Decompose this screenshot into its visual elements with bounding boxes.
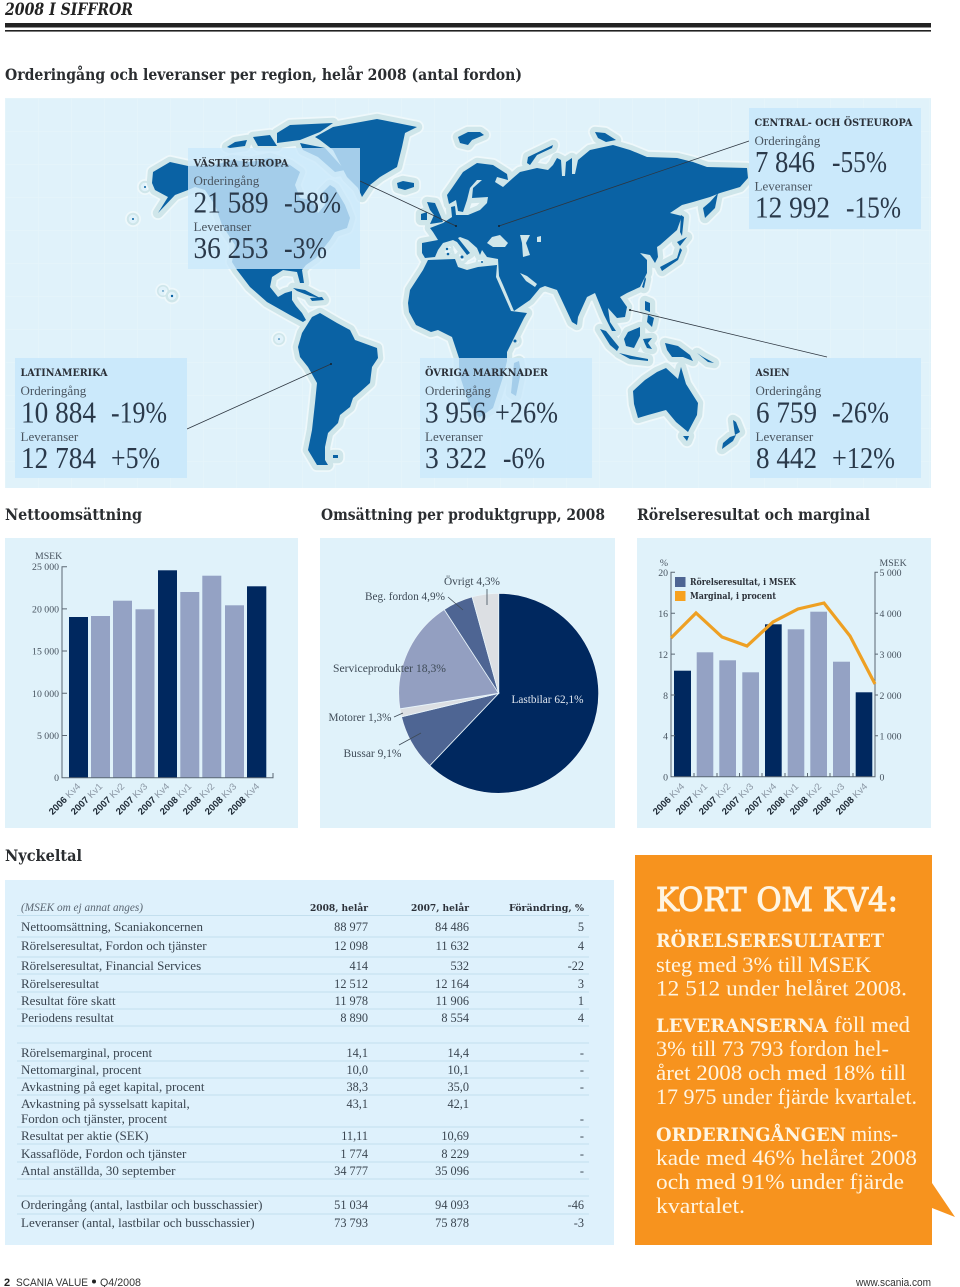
column: 2008: 1 774	[340, 1147, 368, 1161]
row labels	[21, 919, 263, 1230]
callout text: order intake	[656, 1121, 917, 1218]
pie labels	[328, 574, 584, 760]
box: Asien: -26%	[832, 394, 889, 430]
connector lines	[187, 141, 827, 429]
column: 2007: 14,4	[447, 1046, 469, 1060]
column: 2008: 414	[350, 959, 368, 973]
footer: page number and publication	[4, 1277, 141, 1287]
column: 2008: 88 977	[334, 920, 368, 934]
x axis labels: 2008 Kv3	[203, 781, 239, 818]
column: 2007: 532	[451, 959, 469, 973]
left axis labels: 4	[663, 732, 668, 742]
x axis labels	[651, 781, 870, 818]
box: Latinamerika: -19%	[111, 394, 167, 430]
left axis labels: 16	[658, 609, 668, 620]
column: change: -	[580, 1147, 584, 1161]
right axis labels	[880, 558, 907, 784]
pie	[399, 593, 599, 793]
heading: Nyckeltal: Nyckeltal	[5, 846, 82, 865]
table header: Förändring, %	[509, 903, 584, 914]
callout text: operating income: 12 512 under helåret 2008.	[656, 976, 907, 1000]
bars	[69, 570, 266, 778]
box: Central- och Östeuropa: 7 846	[755, 144, 815, 179]
column: 2008: 43,1	[346, 1097, 368, 1111]
pie labels: Övrigt 4,3%	[444, 574, 500, 588]
column: 2008: 11,11	[341, 1129, 368, 1143]
pie labels: Serviceprodukter 18,3%	[333, 663, 446, 675]
box: Asien: Leveranser	[756, 429, 814, 444]
legend: Rörelseresultat, i MSEK	[690, 577, 797, 588]
margin line	[671, 603, 875, 684]
left axis labels: 12	[658, 650, 668, 661]
y axis labels: 10 000	[32, 689, 59, 700]
callout text: order intake: ORDERINGÅNGEN	[656, 1123, 846, 1146]
page title: 2008 I SIFFROR	[4, 0, 133, 20]
callout text: deliveries: LEVERANSERNA	[656, 1015, 828, 1037]
legend: Marginal, i procent	[690, 591, 776, 602]
map: land masses	[132, 119, 748, 465]
box: Västra Europa: 36 253	[194, 230, 268, 265]
callout text: deliveries: föll med	[834, 1012, 910, 1037]
box: Asien: ASIEN	[755, 367, 790, 379]
row labels: Nettoomsättning, Scaniakoncernen	[21, 919, 203, 934]
box: Asien: 8 442	[756, 440, 817, 475]
box: Övriga marknader: +26%	[495, 394, 558, 430]
column: change: 4	[578, 939, 584, 953]
row labels: Fordon och tjänster, procent	[21, 1111, 167, 1126]
row labels: Resultat före skatt	[21, 993, 116, 1008]
column: change: 5	[578, 920, 584, 934]
x axis labels	[47, 781, 262, 818]
row labels: Leveranser (antal, lastbilar och busschassier)	[21, 1215, 255, 1230]
box: Central- och Östeuropa	[749, 108, 921, 229]
panel: operating income and margin chart	[637, 538, 931, 828]
box: Asien	[750, 358, 921, 478]
callout: Kort om Kv4	[635, 855, 955, 1245]
column: change: -22	[568, 959, 584, 973]
column: 2007: 11 906	[436, 994, 469, 1008]
callout text: deliveries: året 2008 och med 18% till	[656, 1060, 906, 1085]
box: Central- och Östeuropa: -55%	[832, 144, 887, 179]
x axis labels: 2007 Kv4	[743, 781, 779, 818]
box: Västra Europa: Orderingång	[194, 173, 260, 188]
column: change: -	[580, 1046, 584, 1060]
row labels: Resultat per aktie (SEK)	[21, 1128, 148, 1143]
column: change: 3	[578, 977, 584, 991]
column: 2008: 38,3	[346, 1080, 368, 1094]
column: 2007	[435, 920, 469, 1230]
box: Övriga marknader: Orderingång	[425, 383, 491, 398]
column: 2007: 94 093	[435, 1198, 469, 1212]
bars	[674, 612, 872, 777]
heading: orders and deliveries per region: Orderingång och leveranser per region, helår 2008 (antal fordon)	[5, 65, 522, 84]
x axis labels: 2007 Kv1	[674, 781, 710, 818]
column: 2007: 84 486	[435, 920, 469, 934]
callout text: order intake: kvartalet.	[656, 1193, 745, 1218]
box: Central- och Östeuropa: 12 992	[755, 190, 830, 224]
box: Central- och Östeuropa: CENTRAL- OCH ÖSTEUROPA	[754, 115, 913, 129]
panel: world map	[5, 98, 931, 488]
box: Asien: +12%	[832, 440, 895, 475]
box: Övriga marknader	[420, 358, 592, 478]
left axis labels: 8	[663, 691, 668, 702]
box: Västra Europa	[188, 148, 360, 269]
column: change: -	[580, 1080, 584, 1094]
right axis labels: 0	[880, 772, 884, 784]
heading: Rörelseresultat och marginal: Rörelseresultat och marginal	[637, 505, 870, 524]
panel: key figures table	[5, 880, 614, 1245]
x axis labels: 2008 Kv1	[765, 781, 801, 818]
panel: net sales bar chart	[5, 538, 298, 828]
x axis labels: 2008 Kv1	[158, 781, 194, 818]
row labels: Periodens resultat	[21, 1010, 114, 1025]
x axis labels: 2007 Kv4	[136, 781, 172, 818]
table header: 2007, helår	[411, 902, 470, 914]
row labels: Orderingång (antal, lastbilar och busschassier)	[21, 1197, 263, 1212]
right axis labels: 2 000	[880, 691, 902, 702]
column: 2007: 12 164	[435, 977, 469, 991]
row labels: Avkastning på eget kapital, procent	[21, 1079, 205, 1094]
box: Västra Europa: -3%	[284, 230, 327, 265]
pie labels: Bussar 9,1%	[344, 748, 402, 760]
box: Övriga marknader: -6%	[503, 440, 545, 475]
right axis labels: 4 000	[880, 609, 902, 620]
box: Latinamerika: Leveranser	[20, 429, 79, 444]
x axis labels: 2008 Kv4	[226, 781, 262, 818]
column: 2008	[334, 920, 368, 1230]
box: Övriga marknader: 3 956	[425, 394, 486, 430]
row labels: Antal anställda, 30 september	[21, 1163, 176, 1178]
right axis labels: 1 000	[880, 732, 902, 742]
column: change: -	[580, 1164, 584, 1178]
left axis labels	[658, 558, 668, 784]
column: 2008: 73 793	[334, 1216, 368, 1230]
left axis labels: %	[660, 558, 668, 569]
x axis labels: 2008 Kv2	[181, 781, 217, 818]
column: 2007: 35 096	[435, 1164, 469, 1178]
callout text: order intake: och med 91% under fjärde	[656, 1169, 904, 1194]
callout text: order intake: kade med 46% helåret 2008	[656, 1145, 917, 1170]
row labels: Kassaflöde, Fordon och tjänster	[21, 1146, 187, 1161]
box: Central- och Östeuropa: -15%	[846, 190, 901, 224]
column: 2007: 42,1	[447, 1097, 469, 1111]
callout text: order intake: mins-	[851, 1121, 898, 1146]
callout text: deliveries: 3% till 73 793 fordon hel-	[656, 1036, 889, 1061]
box: Västra Europa: 21 589	[194, 184, 268, 220]
column: 2008: 10,0	[346, 1063, 368, 1077]
right axis labels: 3 000	[880, 650, 902, 661]
column: change: -46	[568, 1198, 584, 1212]
callout text: operating income: RÖRELSERESULTATET	[656, 929, 884, 952]
y axis labels	[32, 551, 62, 784]
box: Övriga marknader: 3 322	[425, 440, 487, 475]
y axis labels: 25 000	[32, 562, 59, 573]
box: Central- och Östeuropa: Orderingång	[754, 133, 821, 148]
callout text: deliveries: 17 975 under fjärde kvartalet.	[656, 1084, 917, 1109]
row labels: Nettomarginal, procent	[21, 1062, 142, 1077]
box: Övriga marknader: ÖVRIGA MARKNADER	[425, 365, 548, 379]
column: 2007: 8 554	[441, 1011, 469, 1025]
column: change: -	[580, 1063, 584, 1077]
callout text: operating income: steg med 3% till MSEK	[656, 952, 871, 977]
row labels: Rörelseresultat	[21, 976, 99, 991]
column: change: 4	[578, 1011, 584, 1025]
table header: (MSEK om ej annat anges)	[21, 902, 143, 914]
box: Latinamerika: 10 884	[21, 394, 96, 430]
left axis labels: 20	[658, 568, 668, 579]
x axis labels: 2007 Kv3	[720, 781, 756, 818]
column: 2008: 12 098	[334, 939, 368, 953]
row labels: Avkastning på sysselsatt kapital,	[21, 1096, 190, 1111]
panel: sales per product group pie chart	[320, 538, 615, 828]
y axis labels: 5 000	[37, 731, 59, 742]
row labels: Rörelseresultat, Fordon och tjänster	[21, 938, 207, 953]
column: 2008: 8 890	[340, 1011, 368, 1025]
y axis labels: MSEK	[35, 551, 62, 562]
column: 2007: 10,69	[441, 1129, 469, 1143]
column: 2007: 10,1	[447, 1063, 469, 1077]
box: Västra Europa: -58%	[284, 184, 341, 220]
x axis labels: 2007 Kv3	[114, 781, 150, 818]
x axis labels: 2006 Kv4	[47, 781, 83, 818]
box: Asien: 6 759	[756, 394, 817, 430]
right axis labels: 5 000	[880, 568, 902, 579]
pie labels: Beg. fordon 4,9%	[365, 591, 445, 603]
x axis labels: 2008 Kv4	[834, 781, 870, 818]
box: Latinamerika	[15, 358, 187, 478]
heading: Omsättning per produktgrupp: Omsättning per produktgrupp, 2008	[321, 505, 605, 524]
column: 2008: 11 978	[335, 994, 368, 1008]
pie labels: Motorer 1,3%	[328, 712, 392, 724]
legend	[675, 577, 797, 602]
callout text: deliveries	[656, 1012, 917, 1109]
row labels: Rörelseresultat, Financial Services	[21, 958, 201, 973]
x axis labels: 2008 Kv3	[811, 781, 847, 818]
box: Latinamerika: 12 784	[21, 440, 96, 475]
column: change: -3	[574, 1216, 584, 1230]
box: Asien: Orderingång	[756, 383, 822, 398]
right axis labels: MSEK	[880, 558, 907, 569]
callout heading: KORT OM KV4:	[656, 880, 898, 919]
column: 2007: 11 632	[436, 939, 469, 953]
x axis labels: 2008 Kv2	[788, 781, 824, 818]
box: Övriga marknader: Leveranser	[425, 429, 483, 444]
x axis labels: 2006 Kv4	[651, 781, 687, 818]
column: 2008: 14,1	[346, 1046, 368, 1060]
y axis labels: 20 000	[32, 604, 59, 615]
left axis labels: 0	[663, 772, 668, 784]
column: change: -	[580, 1112, 584, 1126]
box: Central- och Östeuropa: Leveranser	[754, 178, 813, 194]
column: change	[568, 920, 584, 1230]
heading: Nettoomsättning: Nettoomsättning	[5, 505, 142, 524]
row labels: Rörelsemarginal, procent	[21, 1045, 153, 1060]
y axis labels: 15 000	[32, 646, 59, 658]
box: Latinamerika: +5%	[111, 440, 160, 475]
callout text: operating income	[656, 929, 907, 1000]
box: Västra Europa: Leveranser	[194, 219, 252, 234]
column: 2007: 8 229	[441, 1147, 469, 1161]
x axis labels: 2007 Kv2	[91, 781, 127, 818]
box: Latinamerika: LATINAMERIKA	[20, 367, 108, 379]
box: Latinamerika: Orderingång	[20, 383, 87, 398]
column: 2008: 34 777	[334, 1164, 368, 1178]
column: change: -	[580, 1129, 584, 1143]
column: 2007: 75 878	[435, 1216, 469, 1230]
x axis labels: 2007 Kv2	[697, 781, 733, 818]
pie labels: Lastbilar 62,1%	[512, 694, 584, 706]
column: 2008: 12 512	[334, 977, 368, 991]
x axis labels: 2007 Kv1	[69, 781, 105, 818]
table header	[21, 902, 584, 914]
y axis labels: 0	[54, 773, 59, 784]
column: 2007: 35,0	[447, 1080, 469, 1094]
box: Västra Europa: VÄSTRA EUROPA	[193, 156, 289, 170]
table header: 2008, helår	[310, 902, 369, 914]
column: change: 1	[578, 994, 584, 1008]
column: 2008: 51 034	[334, 1198, 368, 1212]
